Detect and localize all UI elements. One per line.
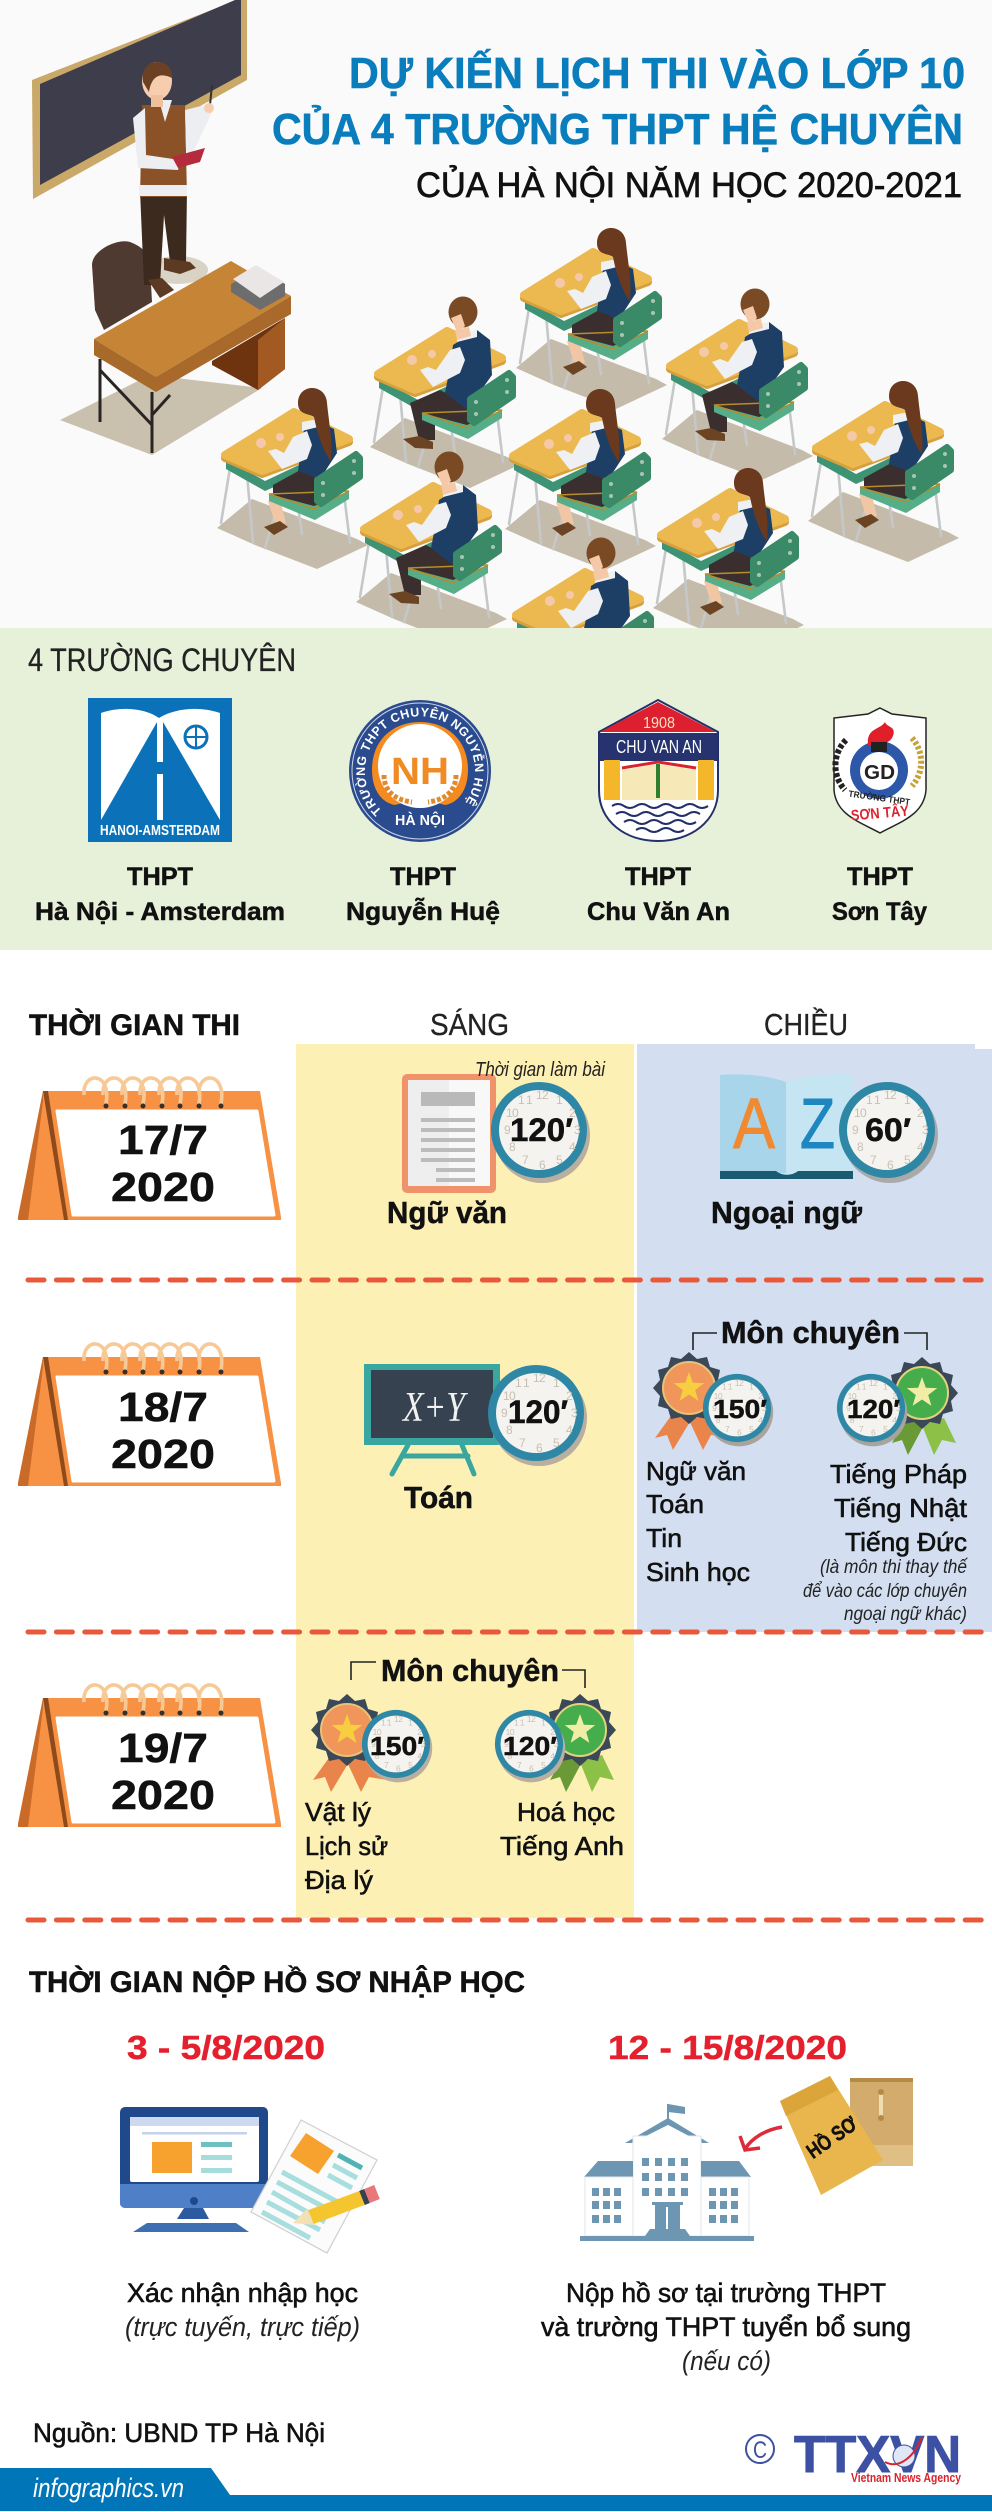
logo: TTXVN: Vietnam News Agency [851, 2471, 961, 2485]
subject list: left: Sinh học [646, 1557, 750, 1587]
calendar: 18/7/2020: 18/7 [118, 1384, 208, 1430]
title: CỦA 4 TRƯỜNG THPT HỆ CHUYÊN [272, 103, 963, 154]
calendar: 18/7/2020 [18, 1344, 281, 1486]
subject list: left morning: Vật lý [305, 1797, 371, 1827]
heading: môn chuyên morning: Môn chuyên [381, 1653, 559, 1688]
panel: application deadlines [29, 1965, 913, 2376]
heading: thời gian nộp hồ sơ: THỜI GIAN NỘP HỒ SƠ NHẬP HỌC [29, 1965, 525, 1999]
medal and clock: 150 minutes: 150′ [713, 1394, 767, 1424]
school names: Chu Văn An [587, 898, 730, 926]
arrow: envelope to school [740, 2127, 782, 2150]
illustration: teacher at blackboard and desk [32, 0, 291, 455]
calendar: 17/7/2020 [18, 1078, 281, 1220]
label: ngoại ngữ: Ngoại ngữ [711, 1195, 863, 1230]
icon: document [402, 1074, 496, 1193]
icon: blackboard [364, 1364, 500, 1474]
subject list: right: Tiếng Nhật [834, 1493, 968, 1523]
subject list: right morning: Tiếng Anh [500, 1831, 624, 1861]
calendar: 19/7/2020: 19/7 [118, 1725, 208, 1771]
subject list: left: Tin [646, 1523, 682, 1553]
subject list: left morning: Lịch sử [305, 1831, 388, 1861]
text: xác nhận nhập học [125, 2278, 360, 2342]
column heading: sáng: SÁNG [430, 1007, 509, 1042]
subject list: left: Ngữ văn [646, 1456, 746, 1486]
subject list: left morning: Địa lý [305, 1865, 373, 1895]
footer band [0, 2468, 992, 2511]
medal and clock: 120 minutes: 123456789101112 [504, 1714, 559, 1774]
text: nộp hồ sơ [541, 2278, 911, 2376]
source: Nguồn: UBND TP Hà Nội [33, 2418, 325, 2448]
school names: Sơn Tây [832, 898, 927, 926]
calendar: 17/7/2020: 17/7 [118, 1117, 208, 1163]
heading: 4 trường chuyên: 4 TRƯỜNG CHUYÊN [28, 642, 296, 678]
heading: môn chuyên afternoon: Môn chuyên [721, 1315, 900, 1350]
school names: THPT [127, 863, 193, 891]
school names: THPT [390, 863, 456, 891]
logo: Hanoi-Amsterdam: HANOI-AMSTERDAM [100, 822, 220, 839]
clock: 120 minutes: 120′ [508, 1394, 568, 1430]
calendar: 18/7/2020: 2020 [111, 1431, 215, 1477]
text: xác nhận nhập học: (trực tuyến, trực tiếp) [125, 2312, 360, 2342]
afternoon column [637, 1044, 992, 1632]
title: DỰ KIẾN LỊCH THI VÀO LỚP 10 [349, 48, 965, 98]
school names: THPT [847, 863, 913, 891]
medal and clock: 120 minutes [837, 1357, 958, 1455]
clock: 120 minutes [491, 1082, 590, 1183]
text: xác nhận nhập học: Xác nhận nhập học [127, 2278, 358, 2308]
school names: Hà Nội - Amsterdam [35, 898, 285, 926]
logo: Nguyễn Huệ: NH [391, 751, 449, 793]
logo: TTXVN: C [753, 2437, 767, 2464]
logo: Sơn Tây [834, 708, 926, 833]
note: replacement subjects [803, 1557, 968, 1625]
subject list: right [830, 1459, 968, 1557]
subject list: right: Tiếng Pháp [830, 1459, 967, 1489]
icon: open book A-Z: A [733, 1085, 776, 1164]
icon: open book A-Z: Z [800, 1085, 835, 1164]
heading: thời gian thi: THỜI GIAN THI [29, 1008, 240, 1042]
icon: computer with form and pencil [120, 2107, 377, 2253]
text: nộp hồ sơ: và trường THPT tuyển bổ sung [541, 2312, 911, 2342]
column heading: chiều: CHIỀU [764, 1007, 848, 1042]
calendar: 19/7/2020: 2020 [111, 1772, 215, 1818]
clock: 120 minutes: 120′ [510, 1112, 573, 1148]
note: thời gian làm bài: Thời gian làm bài [475, 1059, 605, 1081]
title [272, 48, 965, 205]
logo: Hanoi-Amsterdam [88, 698, 232, 842]
note: replacement subjects: để vào các lớp chuyên [803, 1581, 967, 1602]
footer website: infographics.vn [33, 2473, 184, 2503]
subject list: left: Toán [646, 1489, 704, 1519]
panel: 4 schools [0, 628, 992, 950]
medal and clock: 150 minutes [653, 1352, 773, 1450]
label: ngữ văn: Ngữ văn [387, 1195, 507, 1230]
logo: Chu Văn An: 1908 [643, 715, 675, 732]
icon: open book A-Z [720, 1074, 853, 1179]
logo: Sơn Tây: SƠN TÂY [850, 802, 909, 825]
illustration: seated students [217, 228, 959, 729]
clock: 120 minutes: 123456789101112 [501, 1371, 578, 1455]
clock: 60 minutes [839, 1082, 938, 1183]
icon: document envelopes: HỒ SƠ [802, 2112, 862, 2163]
text: nộp hồ sơ: (nếu có) [682, 2346, 771, 2376]
logo: Nguyễn Huệ: TRƯỜNG THPT CHUYÊN NGUYỄN HUỆ [355, 706, 485, 817]
clock: 120 minutes [488, 1365, 587, 1466]
panel: header illustration [0, 0, 992, 729]
school names: THPT [625, 863, 691, 891]
clock: 60 minutes: 123456789101112 [852, 1088, 929, 1172]
subject list: right morning: Hoá học [517, 1797, 615, 1827]
label: toán: Toán [404, 1480, 473, 1515]
medal and clock: 120 minutes: 120′ [503, 1731, 557, 1761]
clock: 120 minutes: 123456789101112 [504, 1088, 581, 1172]
logo: Sơn Tây: TRƯỜNG THPT [848, 788, 911, 807]
clock: 60 minutes: 60′ [865, 1112, 911, 1148]
morning column [296, 1044, 634, 1918]
logo: Chu Văn An: CHU VAN AN [616, 737, 702, 757]
subject list: right: Tiếng Đức [845, 1527, 967, 1557]
medal and clock: 150 minutes: 123456789101112 [712, 1378, 767, 1438]
date: 3-5/8/2020: 3 - 5/8/2020 [127, 2029, 325, 2066]
title: CỦA HÀ NỘI NĂM HỌC 2020-2021 [416, 165, 962, 205]
icon: school building [580, 2104, 754, 2241]
subject list: right morning [500, 1797, 624, 1861]
subject list: left morning [305, 1797, 388, 1895]
subject list: left [646, 1456, 750, 1587]
note: replacement subjects: (là môn thi thay thế [820, 1557, 968, 1578]
date: 12-15/8/2020: 12 - 15/8/2020 [608, 2029, 847, 2066]
panel: exam schedule [18, 1007, 992, 1920]
calendar: 17/7/2020: 2020 [111, 1164, 215, 1210]
note: replacement subjects: ngoại ngữ khác) [844, 1604, 967, 1625]
calendar: 19/7/2020 [18, 1685, 281, 1827]
logo: Sơn Tây: GD [864, 762, 895, 784]
medal and clock: 120 minutes: 120′ [847, 1394, 900, 1424]
text: nộp hồ sơ: Nộp hồ sơ tại trường THPT [566, 2278, 886, 2308]
logo: Nguyễn Huệ: HÀ NỘI [395, 811, 445, 829]
medal and clock: 150 minutes: 123456789101112 [371, 1714, 426, 1774]
medal and clock: 150 minutes [311, 1694, 432, 1792]
school names: Nguyễn Huệ [346, 896, 500, 926]
medal and clock: 120 minutes [495, 1694, 616, 1792]
medal and clock: 150 minutes: 150′ [370, 1731, 424, 1761]
logo: Chu Văn An [599, 700, 718, 841]
icon: document envelopes [780, 2076, 913, 2195]
medal and clock: 120 minutes: 123456789101112 [846, 1378, 901, 1438]
logo: TTXVN: TTXVN [794, 2426, 961, 2484]
school names [35, 863, 927, 926]
icon: blackboard: X+Y [401, 1385, 469, 1431]
